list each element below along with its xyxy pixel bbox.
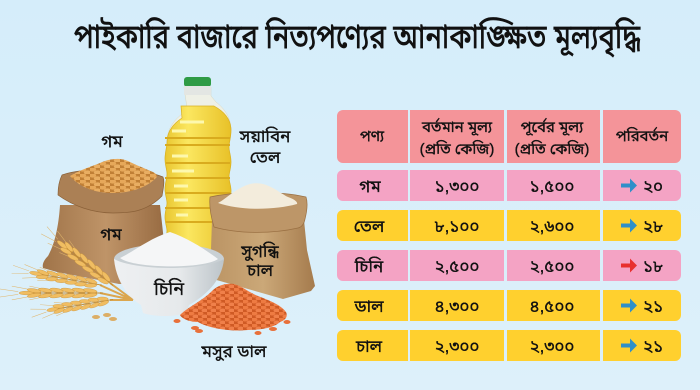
arrow: blue bbox=[621, 178, 637, 192]
illustration: food staples bbox=[0, 77, 315, 362]
icon: sugar bowl bbox=[114, 232, 224, 316]
row: rice: ২,৩০০ bbox=[530, 337, 574, 356]
row: sugar: চিনি bbox=[354, 256, 384, 276]
row: lentils: ২১ bbox=[643, 297, 663, 316]
label: masoor dal: মসুর ডাল bbox=[201, 342, 267, 362]
row: lentils: ৪,৫০০ bbox=[530, 297, 574, 316]
row: lentils: ৪,৩০০ bbox=[435, 297, 479, 316]
table header: পণ্য bbox=[360, 128, 385, 145]
icon: oil bottle bbox=[165, 77, 231, 253]
row: wheat: ২০ bbox=[643, 177, 663, 196]
label: wheat: গম bbox=[101, 132, 123, 151]
label: wheat on sack: গম bbox=[100, 225, 122, 244]
label: sugar: চিনি bbox=[153, 279, 185, 299]
row: sugar bbox=[337, 250, 681, 281]
row: wheat: ১,৫০০ bbox=[530, 177, 574, 196]
row: wheat bbox=[337, 170, 681, 201]
row: rice: ২,৩০০ bbox=[435, 337, 479, 356]
table header: (প্রতি কেজি) bbox=[515, 141, 589, 158]
icon: lentils bbox=[92, 284, 290, 335]
label: aromatic rice: সুগন্ধি bbox=[240, 241, 280, 262]
row: rice: চাল bbox=[355, 337, 383, 356]
row: wheat: গম bbox=[359, 177, 381, 196]
row: lentils: ডাল bbox=[353, 297, 384, 316]
row: sugar: ২,৫০০ bbox=[530, 257, 574, 276]
label: aromatic rice: চাল bbox=[246, 261, 274, 280]
row: lentils bbox=[337, 290, 681, 321]
arrow: blue bbox=[621, 218, 637, 232]
table header: পরিবর্তন bbox=[616, 127, 669, 145]
arrow: blue bbox=[621, 298, 637, 312]
row: oil: ২৮ bbox=[643, 217, 663, 236]
row: oil bbox=[337, 210, 681, 241]
icon: wheat sack bbox=[43, 159, 169, 284]
label: soybean oil: তেল bbox=[250, 148, 281, 167]
row: oil: ২,৬০০ bbox=[530, 217, 574, 236]
label: aromatic rice bbox=[240, 241, 280, 280]
row: oil: তেল bbox=[354, 217, 385, 236]
row: rice bbox=[337, 330, 681, 361]
table header: পূর্বের মূল্য bbox=[521, 118, 584, 136]
arrow: red bbox=[621, 258, 637, 272]
table header: (প্রতি কেজি) bbox=[420, 141, 494, 158]
row: sugar: ২,৫০০ bbox=[435, 257, 479, 276]
table: price comparison bbox=[337, 110, 681, 361]
icon: rice sack bbox=[210, 183, 315, 299]
arrow: blue bbox=[621, 338, 637, 352]
label: soybean oil: সয়াবিন bbox=[239, 126, 291, 146]
row: sugar: ১৮ bbox=[643, 257, 663, 276]
table header bbox=[337, 110, 681, 163]
row: oil: ৮,১০০ bbox=[435, 217, 479, 236]
row: wheat: ১,৩০০ bbox=[435, 177, 479, 196]
table header: বর্তমান মূল্য bbox=[421, 118, 493, 136]
label: soybean oil bbox=[239, 126, 291, 167]
row: rice: ২১ bbox=[643, 337, 663, 356]
icon: wheat stalks bbox=[0, 224, 133, 320]
